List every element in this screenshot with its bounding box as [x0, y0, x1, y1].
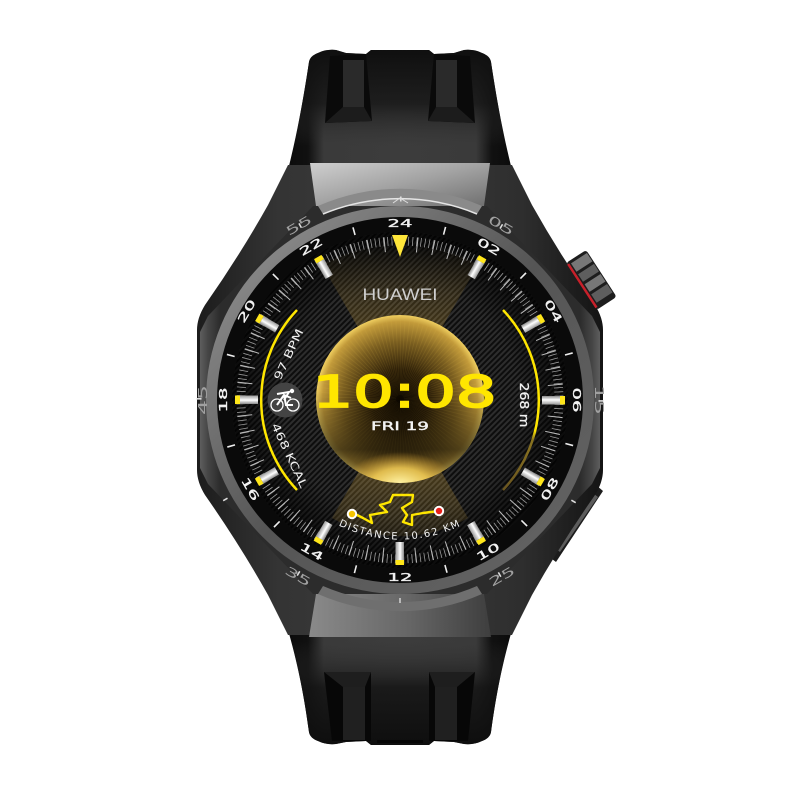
chapter ring numerals: 10	[474, 540, 502, 564]
left yellow arc gauge	[261, 310, 297, 490]
minute scale long ticks	[244, 244, 556, 556]
polished upper lug panel	[310, 163, 490, 206]
top strap	[288, 50, 512, 170]
bezel top band	[318, 189, 482, 214]
chapter ring numerals: 20	[235, 297, 259, 325]
bezel numerals	[196, 212, 606, 590]
chapter ring numerals: 24	[388, 217, 412, 230]
cycling icon	[268, 382, 302, 418]
chapter ring numerals	[217, 217, 583, 584]
bezel bottom band	[318, 586, 482, 611]
heart rate label: 97 BPM	[271, 327, 306, 382]
strap end slot	[377, 740, 423, 743]
route start point	[347, 509, 357, 519]
rotating bezel ring	[125, 125, 675, 675]
lower gold wedge	[332, 400, 468, 536]
brand logo text: HUAWEI	[362, 285, 438, 304]
illustration: smartwatch	[196, 50, 616, 745]
altitude label: 268 m	[517, 382, 531, 428]
chapter ring numerals: 04	[541, 297, 565, 325]
dial face	[232, 232, 568, 568]
top triangle marker	[392, 235, 408, 257]
bottom strap	[288, 630, 512, 745]
golden sphere	[316, 315, 484, 483]
chapter ring numerals: 14	[298, 540, 326, 564]
chapter ring ticks	[187, 187, 613, 613]
button: side pusher	[548, 485, 603, 562]
bezel side ticks	[125, 125, 675, 675]
calories label: 468 KCAL	[268, 421, 310, 491]
watch case	[197, 163, 603, 637]
chapter ring numerals: 02	[475, 235, 503, 259]
crown with red ring	[566, 250, 617, 310]
route map	[347, 495, 444, 525]
bezel numerals: 35	[282, 563, 314, 590]
chapter ring numerals: 12	[388, 571, 412, 584]
right yellow arc gauge	[503, 310, 539, 490]
chapter ring numerals: 06	[570, 388, 583, 412]
hour indices	[235, 255, 565, 565]
minute scale fine ticks	[241, 241, 559, 559]
polished lower lug panel	[309, 594, 491, 637]
strap recess: left	[325, 54, 372, 123]
chapter ring numerals: 08	[538, 475, 562, 503]
route end point	[434, 506, 444, 516]
distance label: DISTANCE 10.62 KM	[339, 519, 460, 540]
upper gold wedge	[322, 244, 478, 400]
chapter ring numerals: 22	[297, 235, 325, 259]
chapter ring numerals: 18	[217, 388, 230, 412]
strap recess: lower right	[429, 672, 475, 741]
bezel numerals: 15	[592, 385, 606, 415]
bezel numerals: 25	[486, 563, 518, 590]
strap recess: lower left	[324, 672, 371, 741]
chapter ring	[187, 187, 613, 613]
bezel marker bottom	[399, 598, 401, 603]
bezel numerals: 55	[283, 212, 315, 239]
bezel numerals: 45	[196, 385, 210, 415]
octagonal bezel frame	[200, 206, 600, 594]
digital time: 10:08	[312, 367, 496, 418]
chapter ring numerals: 16	[238, 475, 262, 503]
bezel numerals: 05	[485, 212, 517, 239]
bezel marker triangle	[393, 198, 408, 203]
date text: FRI 19	[371, 419, 429, 433]
strap recess: right	[428, 54, 475, 123]
